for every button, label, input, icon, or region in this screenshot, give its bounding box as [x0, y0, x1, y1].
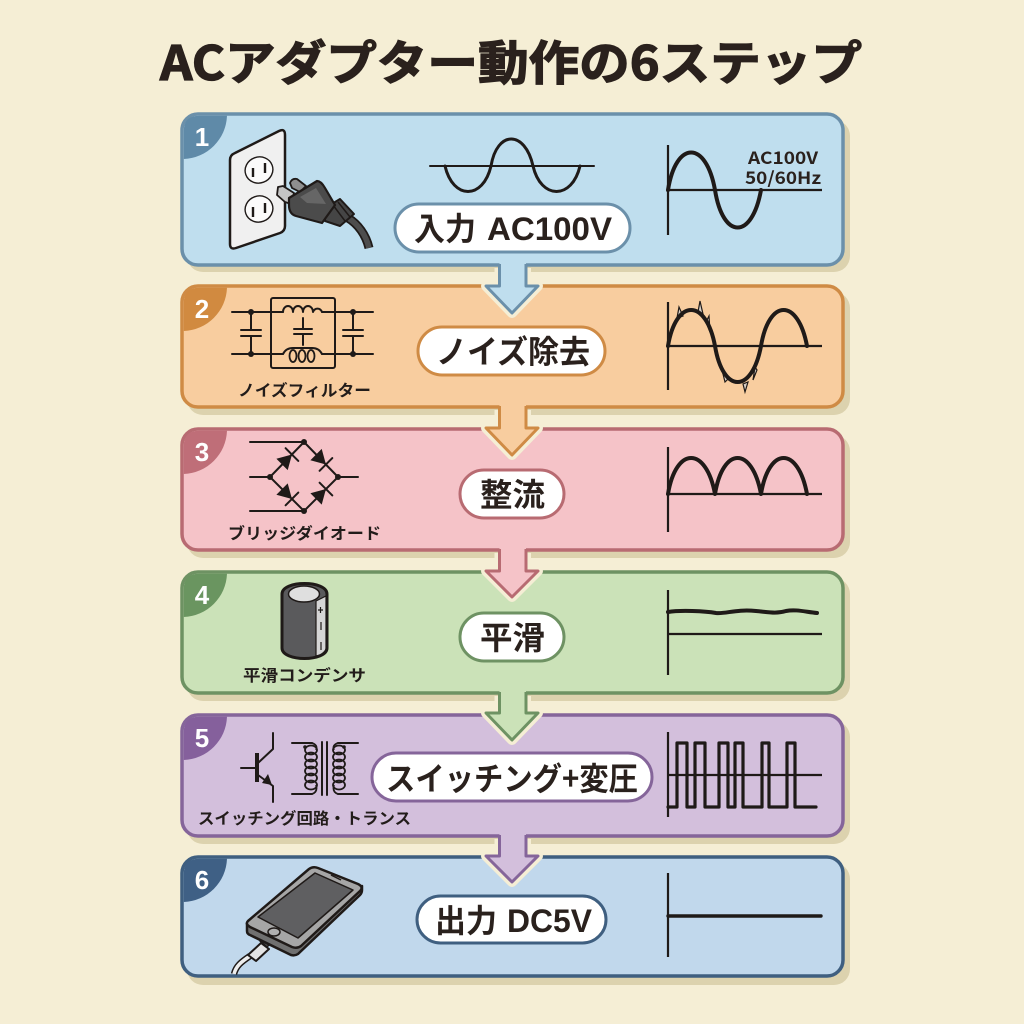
label pill: rectification — [460, 470, 564, 518]
waveform chart: smoothed ripple — [668, 590, 822, 675]
component label: smoothing capacitor: 平滑コンデンサ — [243, 662, 366, 686]
step number badge 2: 2 — [195, 294, 209, 324]
icon: transistor symbol — [241, 733, 273, 802]
label pill: input AC100V: AC100V — [487, 211, 613, 247]
title: ACアダプター動作の6ステップ — [159, 25, 862, 94]
label pill: smoothing — [460, 613, 564, 661]
icon: electrolytic capacitor — [282, 584, 327, 658]
component label: bridge diode: ブリッジダイオード — [228, 520, 381, 544]
step number badge 4 — [184, 574, 227, 617]
waveform chart: full-wave rectified — [668, 447, 822, 532]
arrow: step 5 to step 6 — [486, 833, 538, 882]
arrow: step 3 to step 4 — [486, 547, 538, 597]
label pill: output DC5V: DC5V — [507, 903, 593, 939]
panel: step 2 noise removal — [182, 286, 850, 415]
waveform label: 50/60Hz — [745, 164, 821, 189]
label pill: output DC5V: 出力 — [435, 896, 497, 942]
panel: step 5 switching and voltage conversion — [182, 715, 850, 844]
step number badge 1: 1 — [195, 122, 209, 152]
icon: smartphone with charging cable — [234, 867, 362, 974]
waveform chart: AC sine — [668, 144, 822, 235]
step number badge 5: 5 — [195, 723, 209, 753]
component label: noise filter: ノイズフィルター — [238, 377, 371, 401]
panel: step 6 output DC5V — [182, 857, 850, 985]
waveform label: AC100V — [747, 144, 819, 169]
label pill: output DC5V — [417, 896, 606, 943]
step number badge 5 — [184, 717, 227, 760]
step number badge 3: 3 — [195, 437, 209, 467]
step number badge 2 — [184, 288, 227, 331]
panel: step 3 rectification — [182, 429, 850, 558]
step number badge 6 — [184, 859, 227, 902]
icon: noise filter circuit — [232, 298, 373, 368]
center sine wave — [430, 139, 594, 192]
arrow: step 1 to step 2 — [486, 262, 538, 313]
step number badge 1 — [184, 116, 227, 159]
icon: transformer symbol — [292, 742, 358, 795]
label pill: input AC100V: 入力 — [414, 204, 476, 250]
icon: bridge diode circuit — [250, 439, 358, 514]
label pill: noise removal: ノイズ除去 — [436, 327, 590, 373]
component label: switching circuit and transformer: スイッチング回路・トランス — [198, 805, 411, 829]
panel: step 1 input AC100V — [182, 114, 850, 272]
panel: step 4 smoothing — [182, 572, 850, 701]
waveform chart: switching pulses — [668, 732, 822, 817]
waveform label — [745, 144, 821, 189]
label pill: switching and voltage conversion: スイッチング+変圧 — [386, 754, 638, 800]
label pill: input AC100V — [395, 204, 630, 252]
arrow: step 4 to step 5 — [486, 690, 538, 740]
label pill: rectification: 整流 — [480, 470, 545, 516]
arrow: step 2 to step 3 — [486, 404, 538, 455]
waveform chart: noisy sine — [668, 301, 822, 392]
step number badge 4: 4 — [195, 580, 210, 610]
step number badge 3 — [184, 431, 227, 474]
label pill: smoothing: 平滑 — [480, 613, 545, 659]
step number badge 6: 6 — [195, 865, 209, 895]
icon: wall outlet and plug — [230, 130, 369, 248]
waveform chart: flat DC output — [668, 873, 821, 957]
